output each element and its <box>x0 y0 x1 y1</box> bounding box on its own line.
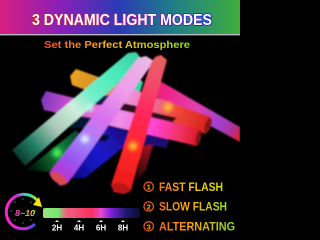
dark gaps between sticks <box>70 74 177 141</box>
mode 2: 2 <box>147 202 151 212</box>
light glows <box>52 102 172 158</box>
mode 3: ALTERNATING <box>159 221 235 233</box>
title: 3 DYNAMIC LIGHT MODES <box>32 12 212 29</box>
duration labels: 6H <box>96 224 106 232</box>
battery duration bar <box>43 208 140 218</box>
timer clock icon <box>6 194 42 229</box>
mode 3: 3 <box>147 222 151 231</box>
stick: lower green <box>26 130 87 172</box>
stick: blue <box>70 125 145 178</box>
stick: purple left <box>41 91 203 146</box>
stick: dark red <box>136 145 153 182</box>
duration labels <box>52 220 128 232</box>
mode 1: FAST FLASH <box>159 182 223 194</box>
duration labels: 4H <box>74 224 84 232</box>
duration labels: 8H <box>118 224 128 232</box>
stick: dim violet <box>105 122 170 148</box>
stick: teal <box>12 52 141 166</box>
header banner <box>0 0 240 35</box>
stick: back teal <box>88 72 143 122</box>
stick: yellow to red <box>70 69 213 134</box>
background <box>0 0 240 240</box>
stick: red <box>111 55 167 195</box>
glow sticks photo <box>12 52 240 195</box>
stick: pink right <box>155 81 240 142</box>
stick: purple white <box>48 56 154 188</box>
subtitle: Set the Perfect Atmosphere <box>44 40 190 51</box>
infographic canvas <box>0 0 240 233</box>
mode 2: SLOW FLASH <box>159 202 227 214</box>
mode list <box>144 182 235 233</box>
duration labels: 2H <box>52 224 62 232</box>
timer clock icon: 8~10 <box>15 209 36 218</box>
mode 1: 1 <box>147 183 151 192</box>
